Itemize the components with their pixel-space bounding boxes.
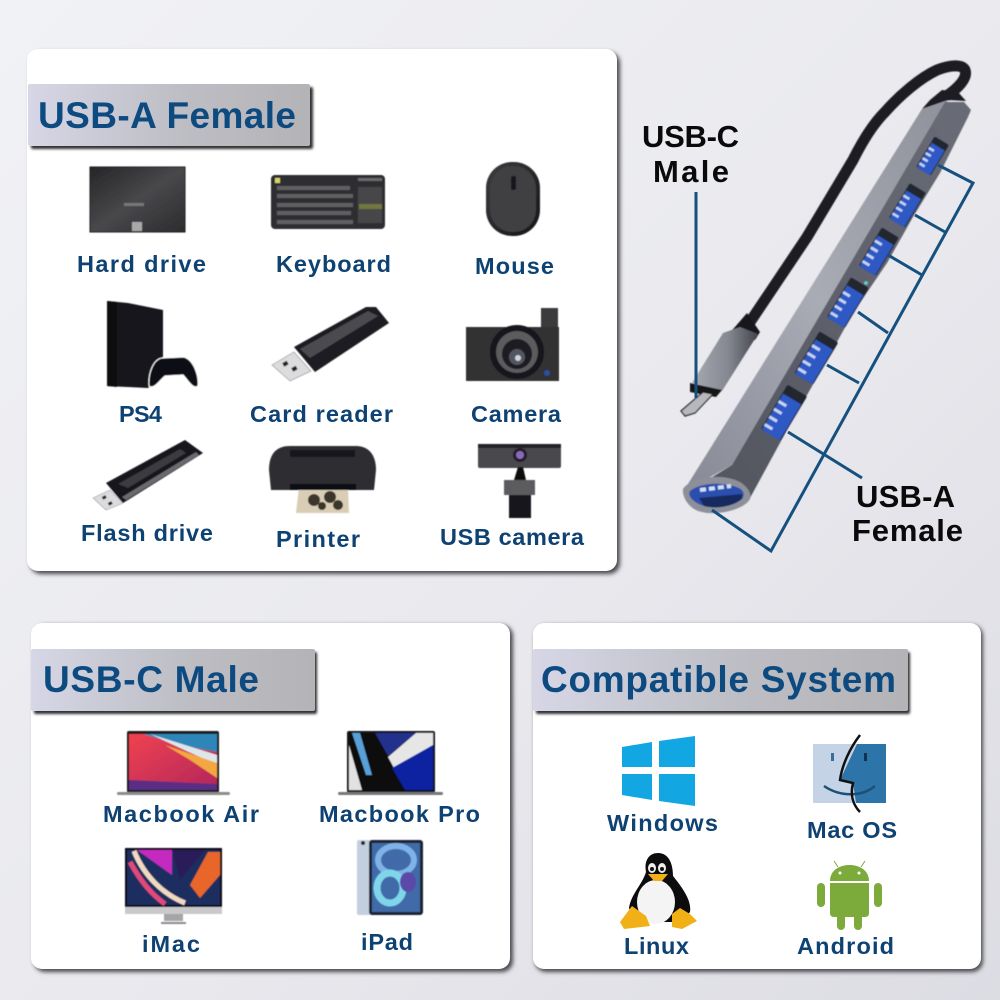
callout label: USB-A Female: Female — [852, 513, 963, 548]
callout line: USB-C Male — [694, 192, 698, 398]
callout lines: USB-A Female bracket — [712, 165, 973, 551]
icon: Linux penguin — [620, 853, 697, 929]
icon: flash drive — [93, 440, 203, 510]
icon: mouse — [486, 162, 540, 236]
callout label: USB-C Male: Male — [653, 154, 729, 189]
label: USB camera: USB camera — [440, 524, 585, 550]
label: Macbook Pro: Macbook Pro — [319, 801, 480, 827]
icon: keyboard — [271, 175, 385, 229]
panel: Compatible System — [533, 623, 983, 972]
label: PS4: PS4 — [119, 401, 162, 427]
label: iPad: iPad — [361, 929, 413, 955]
icon: printer — [269, 446, 376, 513]
label: Keyboard: Keyboard — [276, 251, 391, 277]
heading: Compatible System: Compatible System — [541, 659, 896, 700]
heading: USB-C Male — [31, 649, 317, 714]
label: Linux: Linux — [624, 933, 689, 959]
callout label: USB-A Female: USB-A — [856, 479, 955, 514]
USB-A side ports — [761, 136, 949, 441]
callout label: USB-C Male — [642, 119, 739, 189]
icon: iMac — [125, 848, 222, 924]
callout label: USB-A Female — [852, 479, 963, 548]
label: Flash drive: Flash drive — [81, 520, 213, 546]
heading: USB-A Female: USB-A Female — [38, 95, 296, 136]
icon: Windows logo — [622, 736, 695, 806]
USB-C plug — [681, 313, 760, 416]
icon: USB camera — [478, 444, 561, 518]
label: Mac OS: Mac OS — [807, 817, 897, 843]
label: Card reader: Card reader — [250, 401, 393, 427]
product: USB-C hub — [681, 66, 971, 513]
label: Macbook Air: Macbook Air — [103, 801, 259, 827]
heading: USB-C Male: USB-C Male — [43, 659, 259, 700]
hub body — [683, 90, 971, 513]
icon: Macbook Air — [117, 731, 230, 795]
status LED — [864, 281, 868, 285]
icon: camera — [466, 308, 559, 381]
panel: USB-C Male devices — [31, 623, 513, 972]
icon: Macbook Pro — [338, 731, 443, 795]
panel: USB-A Female devices — [27, 49, 620, 574]
icon: hard drive — [90, 167, 185, 232]
icon: card reader — [272, 307, 389, 381]
icon: Android robot — [817, 861, 882, 930]
heading: USB-A Female — [28, 84, 313, 149]
callout label: USB-C Male: USB-C — [642, 119, 739, 154]
label: Mouse: Mouse — [475, 253, 554, 279]
label: Android: Android — [797, 933, 894, 959]
label: Hard drive: Hard drive — [77, 251, 206, 277]
icon: Mac OS finder — [813, 735, 886, 812]
icon: PS4 console and controller — [107, 301, 198, 388]
label: iMac: iMac — [142, 931, 200, 957]
icon: iPad — [357, 840, 423, 915]
label: Camera: Camera — [471, 401, 562, 427]
label: Windows: Windows — [607, 810, 718, 836]
heading: Compatible System — [533, 649, 910, 714]
cable — [748, 66, 966, 325]
label: Printer: Printer — [276, 526, 360, 552]
